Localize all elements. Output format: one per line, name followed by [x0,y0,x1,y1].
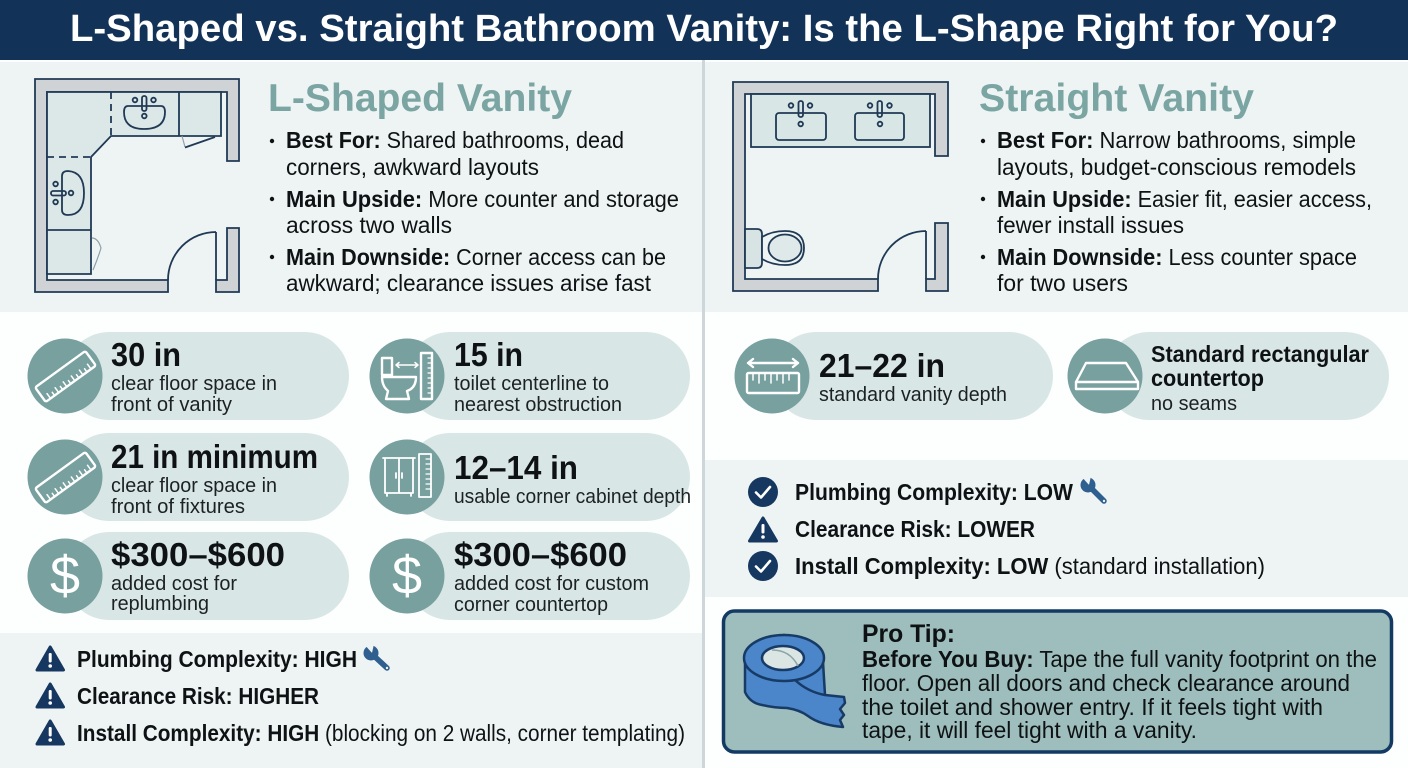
bullet list: straight: Main Downside: Less counter space [997,244,1357,270]
icon: wrench [364,644,388,669]
icon: dollar: $ [392,546,422,606]
callout: pro tip: Pro Tip: [862,620,955,648]
stat: 21-22 in vanity depth: 21–22 in [819,347,945,384]
bullet list: straight: Best For: Narrow bathrooms, simple [997,127,1356,153]
bullet list: L-shaped: Main Downside: Corner access can be [286,244,666,270]
stat: custom countertop cost: added cost for custom [454,573,649,595]
icon: dollar [370,538,444,614]
stat: 12-14 in corner cabinet: usable corner cabinet depth [454,486,691,508]
stat: replumbing cost: replumbing [111,593,209,615]
heading: Straight Vanity: Straight Vanity [979,77,1254,120]
stat: 30 in clear floor space: clear floor space in [111,373,277,395]
icon: dollar [28,538,102,614]
stat: replumbing cost: added cost for [111,573,237,595]
stat: 15 in toilet centerline: nearest obstruction [454,394,622,416]
rating: clearance lower: Clearance Risk: LOWER [795,516,1035,542]
icon: ruler [28,338,102,414]
stat: 12-14 in corner cabinet: 12–14 in [454,449,578,486]
stat: standard countertop: countertop [1151,365,1264,391]
rating: clearance higher: Clearance Risk: HIGHER [77,683,319,709]
stat: 15 in toilet centerline: 15 in [454,336,523,373]
icon: cabinet with ruler [370,440,444,514]
callout: pro tip: floor. Open all doors and check clearance around [862,670,1350,696]
bullet list: L-shaped: across two walls [286,212,452,238]
stat: replumbing cost: $300–$600 [111,536,285,573]
stat: 21 in minimum [28,433,349,521]
callout: pro tip: Before You Buy: Tape the full vanity footprint on the [862,646,1377,672]
callout: pro tip: tape, it will feel tight with a vanity. [862,717,1197,743]
panel: straight overview [705,62,1408,312]
rating: install low: Install Complexity: LOW (standard installation) [795,553,1265,579]
bullet list: straight: for two users [997,270,1128,296]
bullet list: L-shaped [270,127,679,296]
icon: ruler [28,440,102,514]
floor plan: L-shaped vanity [35,79,239,292]
stat: 30 in clear floor space [28,332,349,420]
rating: install high: Install Complexity: HIGH (blocking on 2 walls, corner templating) [77,720,685,746]
icon: wrench [1080,476,1105,502]
bullet list: straight: fewer install issues [997,212,1184,238]
icon: depth ruler [734,338,810,414]
stat: replumbing cost [28,532,349,620]
bullet list: L-shaped: awkward; clearance issues arise fast [286,270,652,296]
stat: 21 in minimum: 21 in minimum [111,438,318,475]
stat: 15 in toilet centerline: toilet centerline to [454,373,609,395]
panel: L-shaped ratings [0,633,702,768]
bullet list: L-shaped: Main Upside: More counter and storage [286,186,679,212]
stat: 30 in clear floor space: front of vanity [111,394,232,416]
panel: L-shaped overview [0,62,702,312]
stat: standard countertop [1068,332,1389,420]
stat: 15 in toilet centerline [370,332,690,420]
bullet list: L-shaped: corners, awkward layouts [286,154,539,180]
icon: toilet with ruler [370,338,444,414]
rating: plumbing high: Plumbing Complexity: HIGH [77,646,357,672]
stat: standard countertop: no seams [1151,393,1237,415]
icon: tape roll [744,635,845,727]
floor plan: straight vanity [733,82,948,291]
rating: plumbing low: Plumbing Complexity: LOW [795,479,1073,505]
stat: custom countertop cost: $300–$600 [454,536,627,573]
stat: custom countertop cost [370,532,690,620]
stat: 21-22 in vanity depth: standard vanity depth [819,384,1007,406]
stat: 12-14 in corner cabinet [370,433,691,521]
callout: pro tip [724,611,1392,752]
bullet list: straight [981,127,1372,296]
heading: L-Shaped Vanity: L-Shaped Vanity [268,77,572,120]
stat: custom countertop cost: corner countertop [454,594,608,616]
stat: 21 in minimum: front of fixtures [111,496,245,518]
header banner [0,0,1408,60]
stat: standard countertop: Standard rectangular [1151,341,1369,367]
stat: 21-22 in vanity depth [734,332,1053,420]
title: L-Shaped vs. Straight Bathroom Vanity: Is the L-Shape Right for You? [70,8,1338,50]
callout: pro tip: the toilet and shower entry. If it feels tight with [862,694,1323,720]
bullet list: straight: Main Upside: Easier fit, easier access, [997,186,1372,212]
icon: dollar: $ [50,546,80,606]
panel: straight ratings [705,460,1408,597]
icon: countertop [1068,338,1142,414]
stat: 30 in clear floor space: 30 in [111,336,181,373]
bullet list: straight: layouts, budget-conscious remodels [997,154,1356,180]
stat: 21 in minimum: clear floor space in [111,475,277,497]
bullet list: L-shaped: Best For: Shared bathrooms, dead [286,127,624,153]
